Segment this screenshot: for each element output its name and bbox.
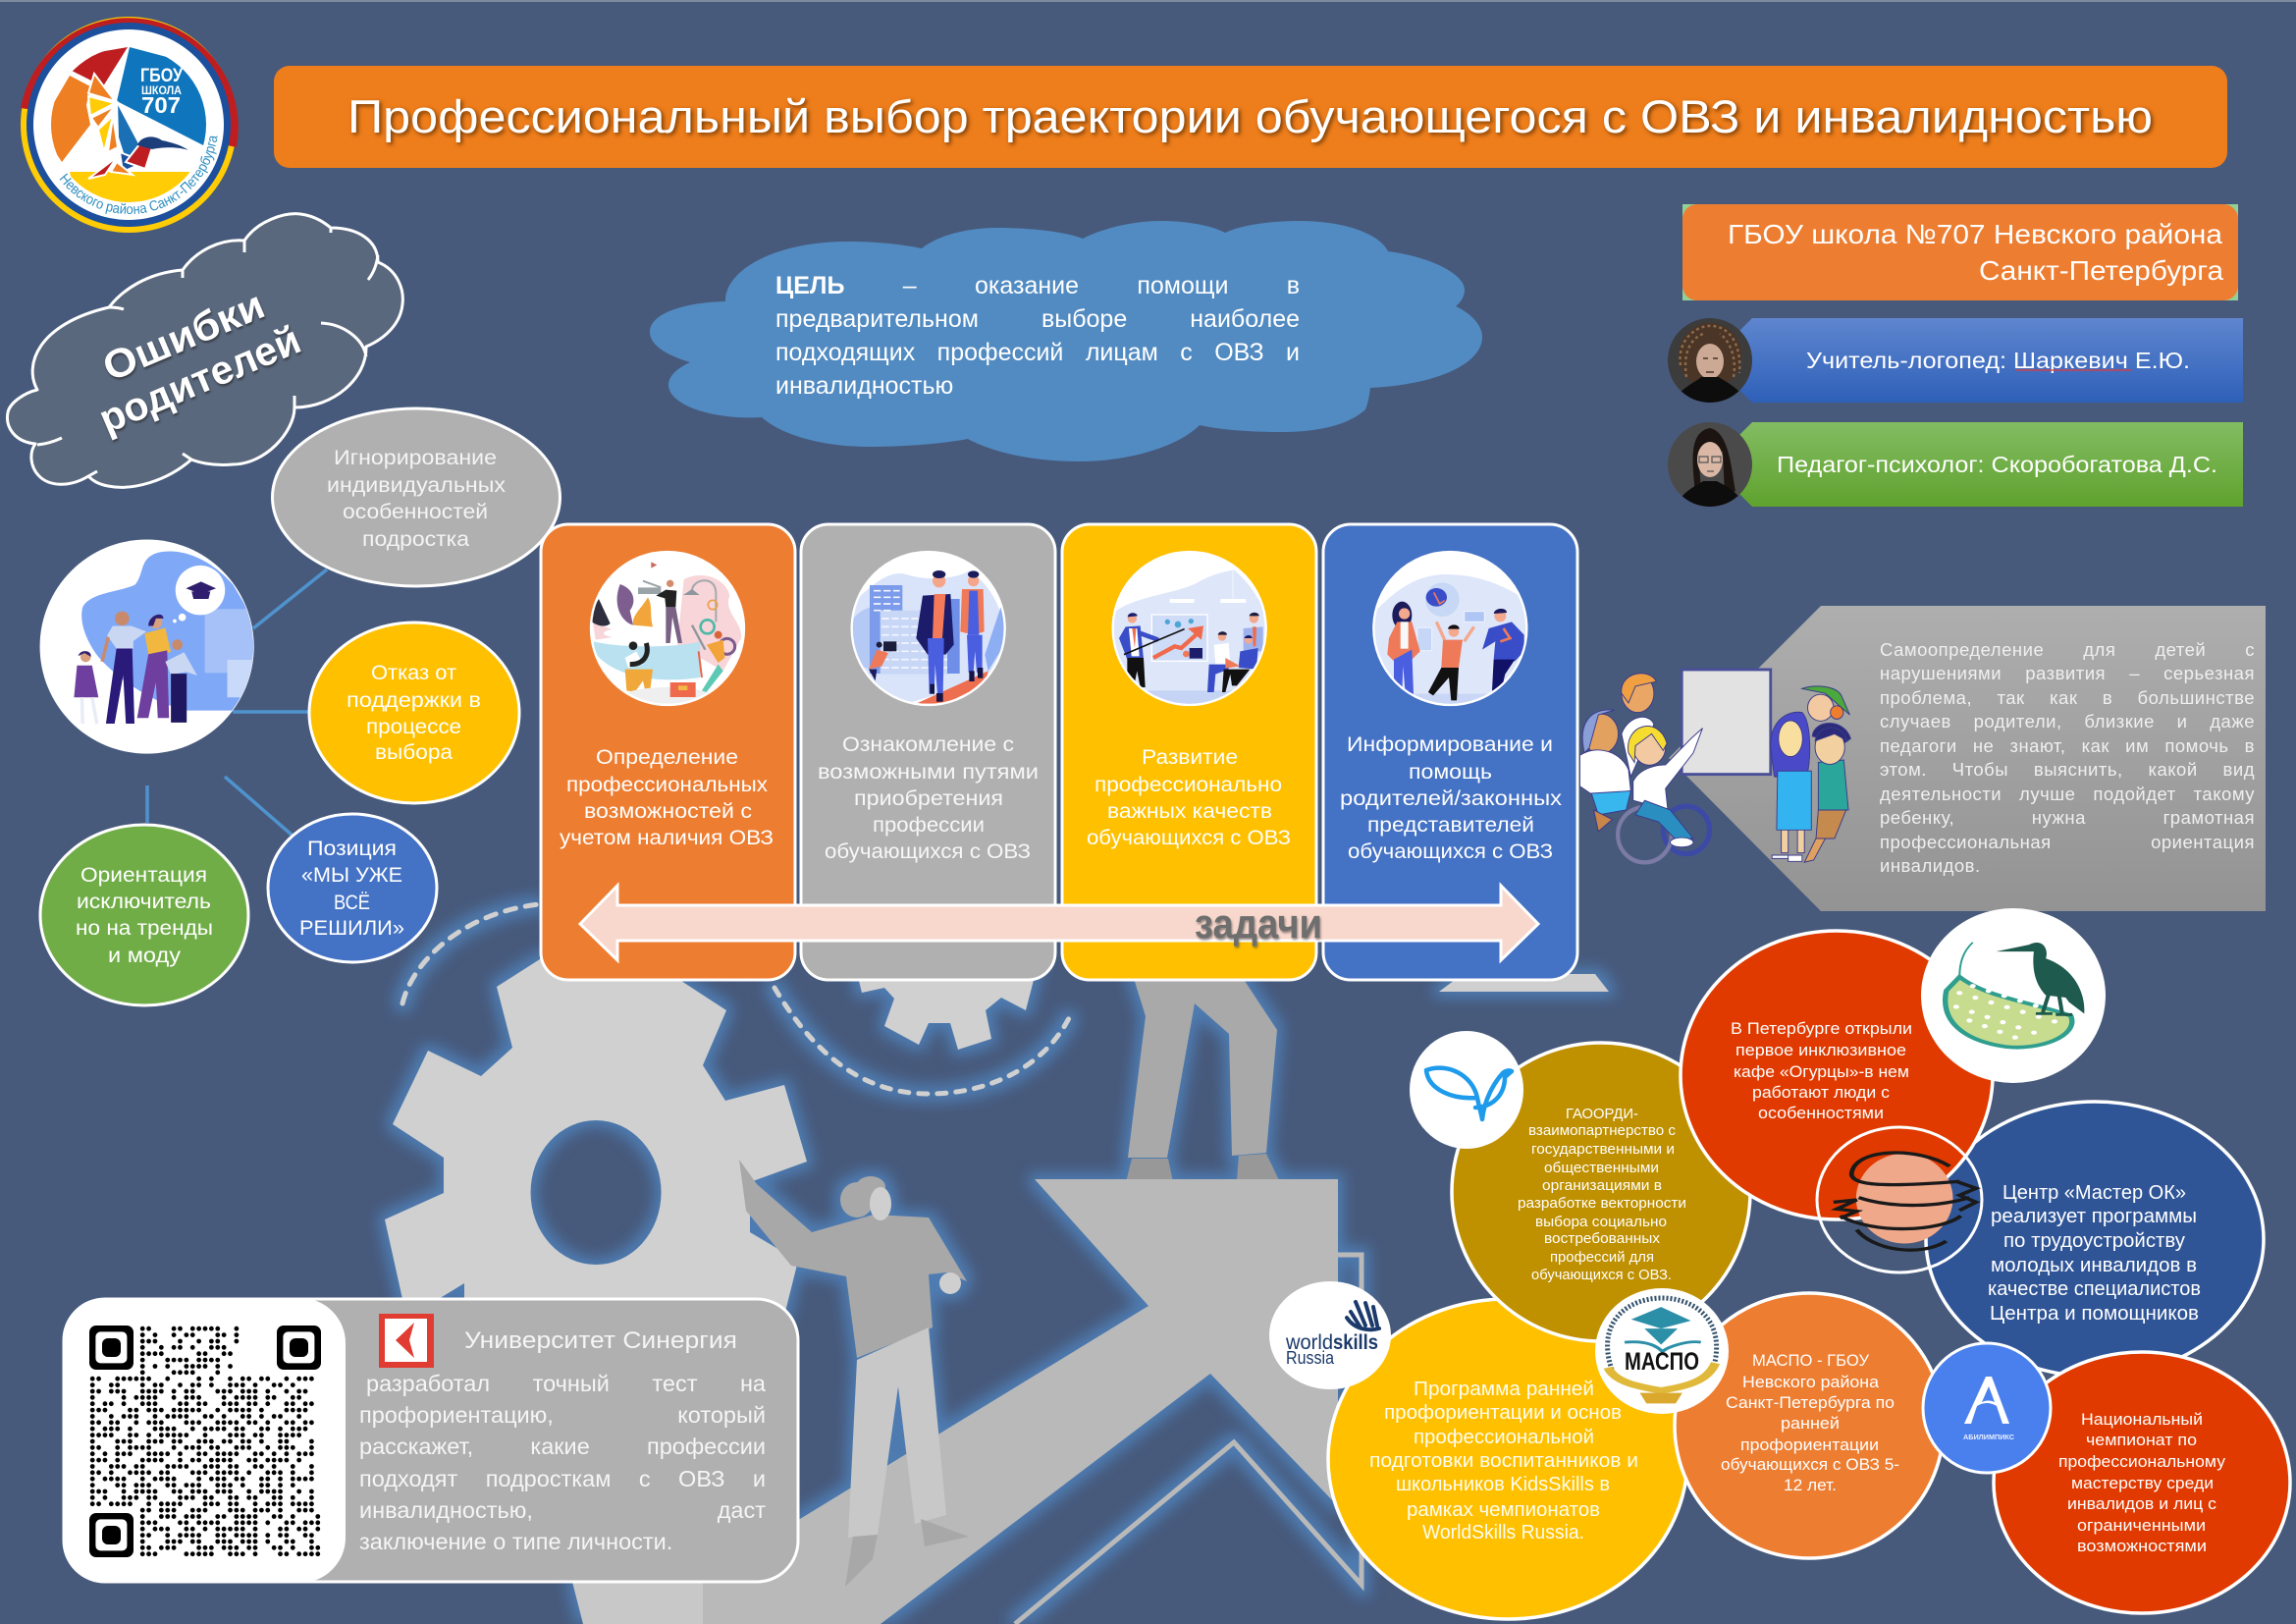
left group and wheelchair	[1579, 674, 1656, 832]
card text	[1087, 745, 1291, 849]
school label: ШКОЛА	[141, 83, 182, 97]
teacher bar: psychologist: Педагог-психолог: Скоробогатова Д.С.	[1777, 452, 2217, 477]
mistake bubble: blue: Позиция	[307, 838, 397, 860]
mistake bubble: yellow: поддержки в	[347, 689, 481, 712]
initiative bubble: national championship: профессиональному	[2058, 1452, 2226, 1471]
logo: WorldSkills Russia	[1269, 1281, 1391, 1389]
panel text: ребенку, нужна грамотная	[1880, 807, 2255, 828]
initiative bubble: MASPO: обучающихся с ОВЗ 5-	[1721, 1455, 1899, 1474]
initiative bubble: Ogurtsy cafe: особенностями	[1758, 1105, 1884, 1122]
panel text: деятельности лучше подойдет такому	[1880, 784, 2255, 803]
school name box: ГБОУ школа №707 Невского района	[1728, 219, 2222, 249]
logo: MASPO: МАСПО	[1625, 1348, 1699, 1376]
mistake bubble: yellow: процессе	[366, 716, 461, 738]
test description: инвалидностью, даст	[359, 1497, 766, 1523]
goal text: предварительном выборе наиболее	[775, 305, 1300, 333]
initiative bubble: Ogurtsy cafe	[1681, 931, 1993, 1219]
children illustration with poster	[1579, 670, 1850, 862]
mistake bubble: green: исключитель	[77, 891, 211, 913]
logo: Ogurtsy bird on cucumber	[1921, 908, 2106, 1083]
mistake bubble: blue: РЕШИЛИ»	[299, 917, 404, 940]
title bar	[274, 66, 2227, 168]
initiative bubble: GAOORDI: общественными	[1544, 1161, 1659, 1176]
school label: ГБОУ	[140, 66, 183, 86]
mistake bubble: gray: индивидуальных	[327, 474, 507, 497]
card text: Определение	[596, 745, 738, 769]
initiative bubble: MASPO: профориентации	[1740, 1435, 1879, 1454]
test description: профориентацию, который	[359, 1402, 766, 1428]
test description: заключение о типе личности.	[359, 1529, 672, 1554]
growth arrow	[628, 1179, 1338, 1624]
school label: 707	[141, 92, 181, 118]
panel text	[1880, 638, 2255, 884]
portrait	[1668, 318, 1752, 405]
mistake bubble: green: но на тренды	[76, 917, 213, 940]
test description: расскажет, какие профессии	[359, 1434, 766, 1459]
card text: профессионально	[1095, 773, 1282, 796]
mistake bubble: green	[40, 825, 248, 1005]
ring	[21, 17, 237, 233]
logo: orange egg with swooshes	[1817, 1127, 1982, 1272]
illustration: trades	[591, 552, 744, 705]
initiative bubble: MASPO: Невского района	[1742, 1373, 1880, 1391]
card text: обучающихся с ОВЗ	[1348, 839, 1553, 863]
initiative bubble: Master OK: молодых инвалидов в	[1991, 1255, 2197, 1276]
initiative bubble: national championship: возможностями	[2077, 1537, 2207, 1555]
Synergy University panel	[63, 1298, 798, 1583]
initiative bubble: Master OK: Центра и помощников	[1990, 1303, 2199, 1325]
double-headed arrow: tasks: задачи	[1195, 900, 1322, 947]
initiative bubble: GAOORDI: ГАООРДИ-	[1566, 1107, 1638, 1122]
initiative bubble: WorldSkills programme: школьников KidsSkills в	[1396, 1474, 1610, 1495]
initiative bubble: GAOORDI: организациями в	[1542, 1178, 1662, 1194]
initiative bubble: MASPO: Санкт-Петербурга по	[1726, 1393, 1895, 1412]
panel text: нарушениями развития – серьезная	[1880, 663, 2255, 683]
big gear	[385, 957, 807, 1316]
initiative bubble: GAOORDI: государственными и	[1531, 1142, 1675, 1158]
task card 4	[1323, 524, 1577, 980]
university name: Университет Синергия	[464, 1327, 737, 1354]
initiative bubble: GAOORDI: взаимопартнерство с	[1528, 1123, 1676, 1139]
teacher bar: speech therapist: Учитель-логопед: Шаркевич Е.Ю.	[1806, 348, 2190, 373]
platform below card 4	[1439, 974, 1609, 992]
card text: важных качеств	[1107, 799, 1272, 823]
initiative bubble: WorldSkills programme: подготовки воспитанников и	[1369, 1450, 1638, 1472]
mistake bubble: blue: «МЫ УЖЕ	[301, 864, 402, 887]
initiative bubble: GAOORDI: обучающихся с ОВЗ.	[1531, 1268, 1672, 1283]
initiative bubble: national championship: Национальный	[2081, 1410, 2203, 1429]
test description	[359, 1368, 766, 1564]
goal text: ЦЕЛЬ – оказание помощи в	[775, 272, 1300, 299]
card text: возможными путями	[818, 760, 1039, 784]
mistake bubble: blue: ВСЁ	[334, 892, 370, 914]
heading cloud: parents' mistakes	[7, 214, 402, 487]
lower figure legs	[572, 1582, 703, 1624]
panel text: проблема, так как в большинстве	[1880, 687, 2255, 707]
card text: профессии	[873, 813, 985, 837]
illustration: business presentation	[1109, 552, 1269, 707]
initiative bubble: WorldSkills programme: профессиональной	[1414, 1427, 1594, 1448]
goal text: подходящих профессий лицам с ОВЗ и	[775, 339, 1300, 366]
initiative bubble: Master OK: Центр «Мастер ОК»	[2002, 1182, 2186, 1204]
goal text	[775, 269, 1300, 406]
initiative bubble: WorldSkills programme: WorldSkills Russia.	[1422, 1522, 1584, 1543]
task card 3	[1062, 524, 1316, 980]
initiative bubble: WorldSkills programme	[1328, 1299, 1687, 1619]
initiative bubble: GAOORDI: профессий для	[1550, 1250, 1654, 1266]
card text: приобретения	[854, 786, 1003, 810]
mistake bubble: gray	[273, 408, 560, 586]
school name box	[1682, 204, 2238, 300]
arrow outline	[1015, 1255, 1362, 1624]
card text: возможностей с	[584, 799, 752, 823]
mistake bubble: yellow: выбора	[375, 741, 453, 764]
initiative bubble: GAOORDI: выбора социально	[1535, 1215, 1667, 1230]
initiative bubble: Master OK: по трудоустройству	[2003, 1230, 2185, 1252]
Synergy logo	[379, 1314, 434, 1368]
school name box: Санкт-Петербурга	[1979, 255, 2223, 286]
school label	[140, 66, 183, 118]
background illustration: gears, people and growth arrow	[385, 904, 1609, 1624]
test description: подходят подросткам с ОВЗ и	[359, 1466, 766, 1491]
mistake bubble: green: и моду	[108, 945, 182, 967]
panel text: профессиональная ориентация	[1880, 831, 2255, 852]
initiative bubble: MASPO: ранней	[1781, 1414, 1840, 1433]
card text: представителей	[1367, 813, 1534, 837]
card text: Ознакомление с	[842, 732, 1014, 756]
panel text: Самоопределение для детей с	[1880, 638, 2255, 660]
card text	[818, 732, 1039, 863]
self-determination panel	[1669, 606, 2266, 911]
card text	[1340, 732, 1562, 863]
panel text: инвалидов.	[1880, 855, 1981, 876]
initiative bubble: GAOORDI: разработке векторности	[1518, 1196, 1686, 1212]
initiative bubble: national championship: инвалидов и лиц с	[2067, 1494, 2217, 1513]
initiative bubble: Ogurtsy cafe: В Петербурге открыли	[1731, 1020, 1912, 1038]
card text: обучающихся с ОВЗ	[1087, 826, 1291, 849]
task card 1	[541, 524, 795, 980]
initiative bubble: GAOORDI: востребованных	[1544, 1231, 1661, 1247]
double-headed arrow: tasks	[580, 886, 1538, 960]
teacher bar: psychologist	[1668, 422, 2243, 511]
small gear	[853, 957, 1040, 1050]
connector lines	[147, 569, 327, 836]
initiative bubble: Master OK: качестве специалистов	[1988, 1278, 2201, 1300]
mistake bubble: green: Ориентация	[80, 864, 207, 887]
goal cloud	[650, 221, 1482, 461]
card text: помощь	[1409, 760, 1492, 784]
logo: MASPO	[1595, 1288, 1729, 1414]
initiative bubble: WorldSkills programme: Программа ранней	[1414, 1379, 1594, 1400]
family illustration	[40, 540, 255, 754]
logo: Abilympics	[1923, 1343, 2051, 1473]
mistake bubble: yellow: Отказ от	[371, 662, 456, 684]
dashed path left	[402, 904, 539, 1003]
panel text: этом. Чтобы выяснить, какой вид	[1880, 759, 2255, 780]
logo badge	[21, 17, 239, 233]
initiative bubble: Ogurtsy cafe: первое инклюзивное	[1735, 1042, 1906, 1059]
test description: разработал точный тест на	[366, 1371, 766, 1396]
card text: Развитие	[1142, 745, 1238, 769]
initiative bubble: Ogurtsy cafe: работают люди с	[1752, 1084, 1890, 1102]
initiative bubble: Master OK: реализует программы	[1991, 1206, 2197, 1227]
mistake bubble: gray: подростка	[362, 528, 469, 551]
card text: обучающихся с ОВЗ	[825, 839, 1031, 863]
heading cloud: parents' mistakes: Ошибки	[96, 282, 271, 390]
logo: WorldSkills Russia: world	[1285, 1331, 1333, 1354]
initiative bubble: MASPO	[1675, 1293, 1944, 1558]
card text: родителей/законных	[1340, 786, 1562, 810]
dashed path middle	[774, 988, 1070, 1094]
mistake bubble: gray: Игнорирование	[334, 447, 497, 469]
initiative bubble: MASPO: МАСПО - ГБОУ	[1752, 1351, 1869, 1370]
initiative bubble: WorldSkills programme: рамках чемпионатов	[1407, 1499, 1600, 1521]
woman pointing at the gear	[739, 1160, 969, 1587]
initiative bubble: national championship	[1994, 1352, 2290, 1613]
task card 2	[801, 524, 1055, 980]
initiative bubble: GAOORDI	[1452, 1043, 1750, 1341]
panel text: случаев родители, близкие и даже	[1880, 711, 2255, 731]
mistake bubble: yellow	[309, 623, 519, 803]
initiative bubble: Ogurtsy cafe: кафе «Огурцы»-в нем	[1734, 1063, 1909, 1081]
initiative bubble: MASPO: 12 лет.	[1784, 1476, 1837, 1494]
portrait	[1668, 422, 1752, 511]
right group	[1771, 686, 1850, 862]
title bar: Профессиональный выбор траектории обучающегося с ОВЗ и инвалидностью	[347, 90, 2153, 142]
QR code	[63, 1298, 346, 1583]
initiative bubble: national championship: ограниченными	[2077, 1516, 2206, 1535]
teacher bar: speech therapist	[1668, 318, 2243, 405]
card text	[560, 745, 774, 849]
standing figure legs	[1126, 972, 1279, 1182]
logo: WorldSkills Russia: Russia	[1286, 1348, 1335, 1368]
illustration: family consultation	[1371, 552, 1531, 707]
logo: dove	[1410, 1031, 1523, 1149]
initiative bubble: WorldSkills programme: профориентации и основ	[1384, 1402, 1622, 1424]
poster	[1682, 670, 1771, 775]
mistake bubble: blue	[268, 814, 437, 962]
mistake bubble: gray: особенностей	[343, 501, 488, 523]
logo: WorldSkills Russia: skills	[1333, 1331, 1378, 1354]
goal text: инвалидностью	[775, 372, 953, 400]
card text: учетом наличия ОВЗ	[560, 826, 774, 849]
logo: Abilympics: АБИЛИМПИКС	[1963, 1433, 2015, 1441]
heading cloud: parents' mistakes: родителей	[92, 317, 307, 442]
initiative bubble: national championship: чемпионат по	[2086, 1431, 2197, 1449]
illustration: professions in the city	[851, 552, 1005, 705]
circular caption: Невского района Санкт-Петербурга	[59, 135, 218, 214]
initiative bubble: national championship: мастерству среди	[2071, 1474, 2214, 1492]
emblem artwork	[51, 47, 206, 202]
card text: профессиональных	[566, 773, 768, 796]
initiative bubble: Master OK	[1926, 1102, 2264, 1377]
panel text: педагоги не знают, как им помочь в	[1880, 734, 2255, 756]
card text: Информирование и	[1347, 732, 1553, 756]
